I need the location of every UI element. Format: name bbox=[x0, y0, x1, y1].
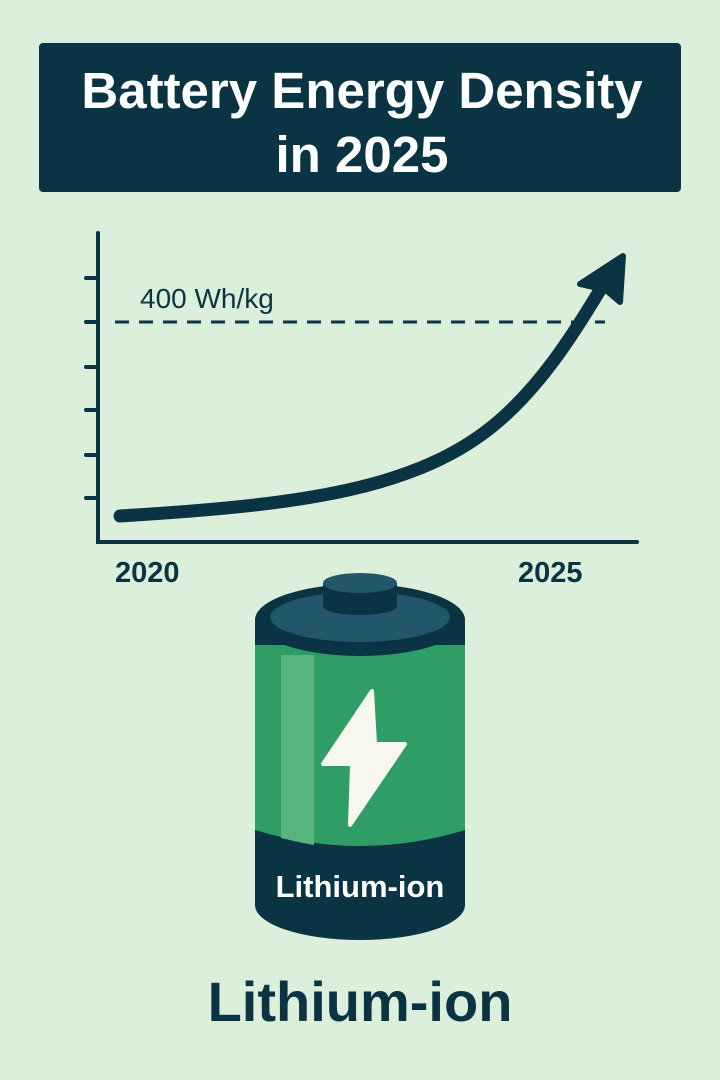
battery icon bbox=[255, 573, 465, 940]
axes bbox=[86, 233, 637, 542]
title: in 2025 bbox=[276, 126, 448, 183]
title bbox=[39, 43, 681, 192]
body bottom bbox=[255, 620, 465, 940]
threshold label: 400 Wh/kg bbox=[140, 283, 274, 314]
battery label: Lithium-ion bbox=[276, 869, 444, 904]
lightning bolt bbox=[323, 691, 405, 825]
chart: 2025 bbox=[518, 557, 583, 589]
x labels: 2020 bbox=[115, 557, 180, 589]
growth arrow bbox=[120, 256, 623, 516]
threshold line bbox=[115, 320, 605, 324]
bottom label: Lithium-ion bbox=[208, 970, 512, 1033]
green band bbox=[255, 645, 465, 846]
terminal bbox=[323, 583, 397, 615]
title: Battery Energy Density bbox=[81, 62, 643, 119]
chart bbox=[86, 233, 637, 589]
top bbox=[255, 584, 465, 656]
